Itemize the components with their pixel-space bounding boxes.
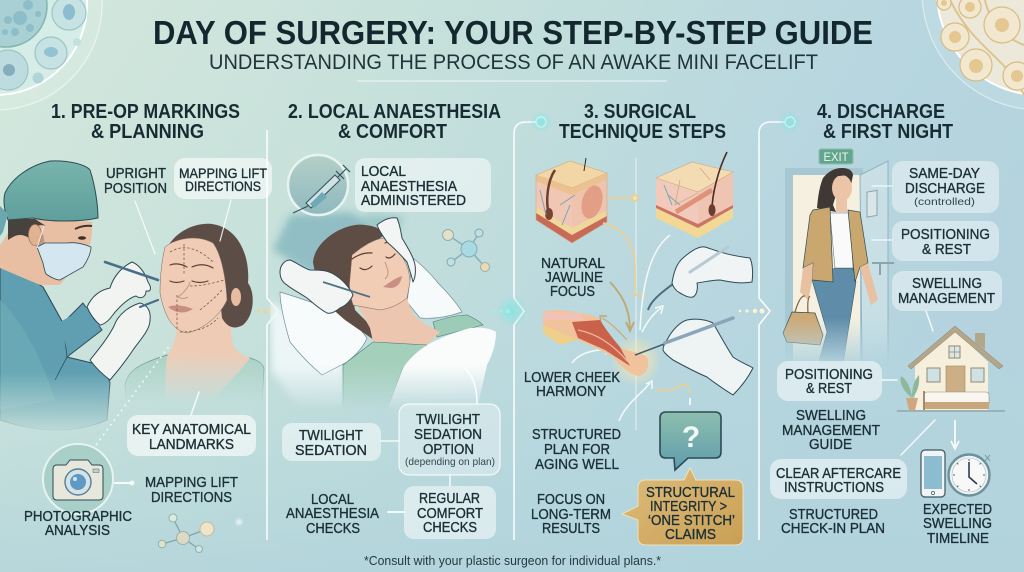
pill: same-day discharge: (controlled): [914, 196, 975, 208]
label: focus on long-term results: LONG-TERM: [531, 507, 611, 523]
label: swelling management guide: MANAGEMENT: [782, 423, 880, 439]
pill: positioning and rest: & REST: [922, 242, 971, 258]
white flow arrows: [572, 235, 690, 421]
exit sign: [819, 149, 853, 164]
icon: camera: [43, 444, 113, 514]
pill: positioning and rest: POSITIONING: [901, 227, 990, 243]
pill: swelling management: MANAGEMENT: [898, 291, 995, 307]
column dividers: [267, 117, 795, 540]
patient with surgical markings: [125, 224, 264, 405]
callout: structural integrity: INTEGRITY >: [650, 499, 727, 515]
label: swelling management guide: [782, 408, 880, 453]
box: twilight sedation option: (depending on plan): [405, 456, 495, 468]
pill: clear aftercare instructions: INSTRUCTIONS: [784, 480, 884, 496]
pill: positioning and rest, home: & REST: [806, 381, 852, 397]
panel: 2. local anaesthesia and comfort: [270, 101, 501, 539]
label: focus on long-term results: RESULTS: [542, 521, 600, 537]
label: natural jawline focus: NATURAL: [541, 256, 605, 272]
decoration: top-left cell circle: [0, 0, 102, 110]
label: mapping lift directions: MAPPING LIFT: [145, 475, 238, 491]
footer disclaimer: *Consult with your plastic surgeon for individual plans.*: [364, 553, 661, 568]
label: local anaesthesia checks: ANAESTHESIA: [286, 506, 379, 522]
label: mapping lift directions: DIRECTIONS: [151, 490, 232, 506]
pill: same-day discharge: SAME-DAY: [909, 166, 980, 182]
illustration: surgeon: [0, 161, 110, 430]
icon: smartphone: [921, 450, 945, 497]
label: structured plan for aging well: [532, 427, 621, 473]
label: swelling management guide: SWELLING: [796, 408, 866, 424]
heading: step 2: & COMFORT: [338, 121, 447, 143]
label: structured check-in plan: [781, 507, 885, 537]
box: twilight sedation option: [399, 404, 500, 475]
pill: clear aftercare instructions: [770, 459, 907, 499]
icon: question speech bubble: ?: [682, 421, 700, 454]
label: lower cheek harmony: [524, 370, 620, 400]
label: structured check-in plan: STRUCTURED: [789, 507, 878, 523]
icon: question speech bubble: [660, 412, 721, 470]
label: expected swelling timeline: SWELLING: [923, 516, 992, 532]
pill: swelling management: SWELLING: [912, 276, 982, 292]
heading: step 4: & FIRST NIGHT: [823, 121, 953, 143]
callout: structural integrity: [622, 468, 743, 545]
label: upright position: UPRIGHT: [106, 166, 166, 182]
callout: structural integrity: CLAIMS: [665, 527, 716, 543]
label: structured plan for aging well: PLAN FOR: [544, 442, 610, 458]
surgeon hands with marking pens: [60, 262, 158, 380]
pill: local anaesthesia administered: [355, 158, 491, 212]
icon: clock: [948, 454, 990, 496]
label: natural jawline focus: [541, 256, 605, 300]
illustration: reclining patient receiving local anaesthesia: [270, 212, 496, 410]
illustration: skin cross-section left: [536, 158, 607, 243]
icon: house with bed: [897, 326, 1005, 411]
icon: syringe: [288, 155, 350, 215]
heading: step 4: 4. DISCHARGE: [817, 101, 945, 123]
pill: regular comfort checks: REGULAR: [419, 491, 480, 507]
pill: mapping lift directions: [174, 158, 272, 199]
box: twilight sedation option: TWILIGHT: [416, 412, 480, 428]
box: twilight sedation option: SEDATION: [414, 427, 482, 443]
icon: molecule: [158, 514, 214, 552]
pill: key anatomical landmarks: [127, 415, 256, 456]
gold connector lines: [600, 195, 690, 393]
decoration: top-right cell circle: [922, 0, 1024, 110]
label: expected swelling timeline: [923, 502, 992, 547]
subtitle: UNDERSTANDING THE PROCESS OF AN AWAKE MINI FACELIFT: [209, 51, 818, 74]
exit sign: EXIT: [824, 152, 848, 164]
label: focus on long-term results: FOCUS ON: [537, 492, 605, 508]
label: local anaesthesia checks: CHECKS: [306, 521, 360, 537]
label: upright position: [104, 166, 167, 197]
label: swelling management guide: GUIDE: [809, 437, 852, 453]
heading: step 4: [817, 101, 953, 143]
label: natural jawline focus: JAWLINE: [545, 270, 603, 286]
illustration: woman leaving through door: [783, 161, 894, 365]
pill: twilight sedation: [282, 423, 381, 461]
heading: step 1: 1. PRE-OP MARKINGS: [51, 101, 240, 123]
box: twilight sedation option: OPTION: [423, 442, 474, 458]
icon: molecule: [442, 229, 490, 272]
heading: step 3: [559, 101, 726, 143]
heading: step 3: 3. SURGICAL: [584, 101, 696, 123]
pill: mapping lift directions: DIRECTIONS: [185, 179, 261, 194]
pill: local anaesthesia administered: ADMINISTERED: [361, 193, 466, 209]
pill: mapping lift directions: MAPPING LIFT: [179, 166, 267, 181]
label: natural jawline focus: FOCUS: [550, 284, 595, 300]
pill: local anaesthesia administered: ANAESTHESIA: [361, 179, 457, 195]
pill: same-day discharge: DISCHARGE: [905, 181, 985, 197]
label: focus on long-term results: [531, 492, 611, 537]
label: lower cheek harmony: LOWER CHEEK: [524, 370, 620, 386]
label: structured plan for aging well: STRUCTURED: [532, 427, 621, 443]
panel: 4. discharge and first night: [770, 101, 1005, 547]
panel: 3. surgical technique steps: [524, 101, 753, 545]
pill: key anatomical landmarks: KEY ANATOMICAL: [132, 422, 251, 438]
label: expected swelling timeline: TIMELINE: [927, 531, 989, 547]
label: photographic analysis: PHOTOGRAPHIC: [24, 509, 132, 525]
label: local anaesthesia checks: LOCAL: [311, 492, 354, 508]
callout: structural integrity: ‘ONE STITCH’: [648, 513, 735, 529]
illustration: tissue layers under lift: [543, 310, 662, 387]
pill: twilight sedation: TWILIGHT: [299, 428, 363, 444]
pill: positioning and rest, home: [777, 361, 882, 401]
pill: swelling management: [892, 271, 1002, 311]
pill: positioning and rest: [892, 221, 999, 261]
pill: regular comfort checks: COMFORT: [417, 506, 483, 522]
pill: same-day discharge: [892, 161, 999, 213]
gloved hand with scalpel: [635, 318, 753, 395]
gloved hand with forceps: [648, 247, 753, 310]
pill: key anatomical landmarks: LANDMARKS: [149, 437, 234, 453]
label: photographic analysis: [24, 509, 132, 539]
gloved hand with injector: [280, 260, 370, 313]
label: upright position: POSITION: [104, 181, 167, 197]
pill: clear aftercare instructions: CLEAR AFTERCARE: [776, 466, 901, 482]
label: expected swelling timeline: EXPECTED: [923, 502, 992, 518]
label: photographic analysis: ANALYSIS: [45, 523, 110, 539]
label: structured check-in plan: CHECK-IN PLAN: [781, 521, 885, 537]
illustration: skin cross-section right: [656, 152, 733, 238]
pill: twilight sedation: SEDATION: [295, 443, 367, 459]
pill: local anaesthesia administered: LOCAL: [361, 164, 406, 180]
label: structured plan for aging well: AGING WELL: [535, 457, 619, 473]
heading: step 2: 2. LOCAL ANAESTHESIA: [288, 101, 501, 123]
pill: positioning and rest, home: POSITIONING: [785, 367, 873, 383]
heading: step 1: & PLANNING: [91, 121, 204, 143]
title: DAY OF SURGERY: YOUR STEP-BY-STEP GUIDE: [153, 14, 873, 51]
pill: regular comfort checks: CHECKS: [423, 520, 477, 536]
label: mapping lift directions: [145, 475, 238, 506]
panel: 1. pre-op markings and planning: [0, 101, 272, 552]
label: lower cheek harmony: HARMONY: [536, 384, 606, 400]
callout: structural integrity: STRUCTURAL: [646, 485, 735, 501]
pill: regular comfort checks: [404, 486, 496, 539]
heading: step 1: [51, 101, 240, 143]
heading: step 2: [288, 101, 501, 143]
heading: step 3: TECHNIQUE STEPS: [559, 121, 726, 143]
label: local anaesthesia checks: [286, 492, 379, 537]
